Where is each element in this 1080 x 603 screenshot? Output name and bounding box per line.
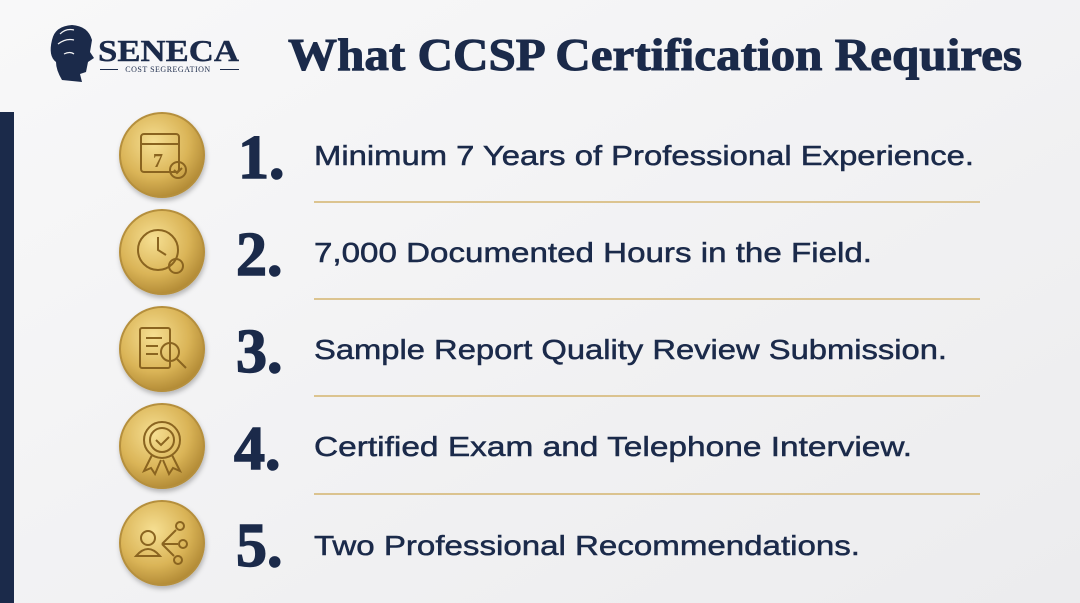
item 5: Two Professional Recommendations. bbox=[314, 530, 860, 561]
logo bbox=[51, 25, 240, 82]
item 5 bbox=[120, 501, 860, 585]
left accent bar bbox=[0, 112, 14, 603]
item 3: Sample Report Quality Review Submission. bbox=[314, 334, 947, 365]
item 3: 3. bbox=[236, 318, 282, 386]
logo: COST SEGREGATION bbox=[125, 65, 211, 74]
icon: calendar coin bbox=[120, 113, 204, 197]
title: What CCSP Certification Requires bbox=[288, 29, 1022, 80]
item 2 bbox=[120, 210, 872, 294]
item 1: 1. bbox=[238, 124, 284, 192]
item 1 bbox=[120, 113, 974, 197]
icon: calendar coin: 7 bbox=[153, 150, 163, 172]
icon: report coin bbox=[120, 307, 204, 391]
icon: clock coin bbox=[120, 210, 204, 294]
item 3 bbox=[120, 307, 947, 391]
item 4: Certified Exam and Telephone Interview. bbox=[314, 431, 912, 462]
list items bbox=[120, 113, 980, 585]
icon: head bust bbox=[51, 25, 94, 82]
item 1: Minimum 7 Years of Professional Experience. bbox=[314, 140, 974, 171]
item 5: 5. bbox=[236, 512, 282, 580]
item 4 bbox=[120, 404, 912, 488]
icon: people network coin bbox=[120, 501, 204, 585]
item 4: 4. bbox=[234, 415, 280, 483]
logo text: SENECA bbox=[98, 33, 240, 68]
icon: badge coin bbox=[120, 404, 204, 488]
item 2: 2. bbox=[236, 221, 282, 289]
item 2: 7,000 Documented Hours in the Field. bbox=[314, 237, 872, 268]
